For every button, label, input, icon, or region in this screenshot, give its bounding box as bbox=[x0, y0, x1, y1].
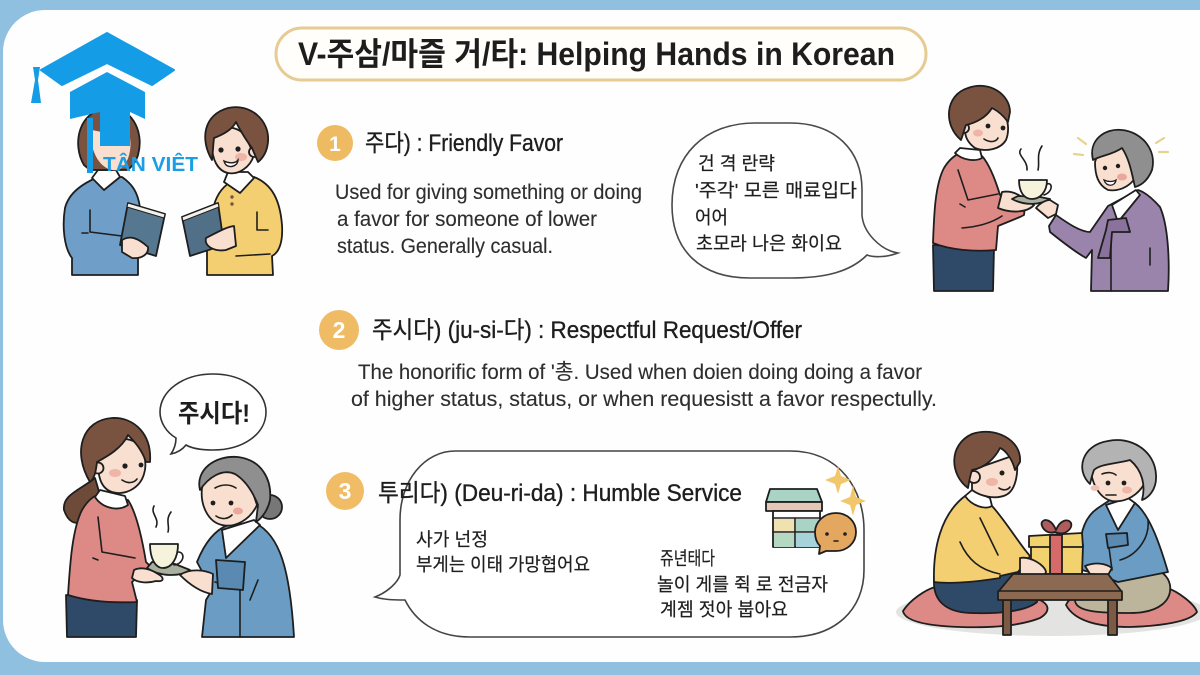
logo: Tan Viet graduation cap: TÂN VIÊT bbox=[103, 152, 198, 176]
illustration: two students with books bbox=[64, 107, 282, 275]
illustration: woman serving tea to grandmother bbox=[64, 374, 294, 637]
description 1: status. Generally casual. bbox=[337, 234, 553, 258]
bubble text right: 놀이 게를 쥑 로 전금자 bbox=[657, 574, 828, 595]
description 1: Used for giving something or doing bbox=[335, 180, 642, 204]
bubble text right: 계젬 젓아 붑아요 bbox=[660, 599, 788, 620]
bubble text left: 사가 넌정 bbox=[416, 529, 488, 550]
logo: Tan Viet graduation cap bbox=[31, 33, 198, 176]
icon: number 3 badge: 3 bbox=[339, 478, 351, 504]
title: V-주삼/마즐 거/타: Helping Hands in Korean bbox=[298, 36, 895, 72]
heading 3: 투리다) (Deu-ri-da) : Humble Service bbox=[378, 480, 742, 507]
heading 1: 주다) : Friendly Favor bbox=[365, 130, 563, 157]
bubble text left: 부게는 이태 가망협어요 bbox=[416, 554, 590, 575]
icon: number 1 badge: 1 bbox=[329, 133, 341, 156]
illustration: offering a gift to grandmother at low table bbox=[896, 432, 1200, 636]
description 2: of higher status, status, or when requesistt a favor respectully. bbox=[351, 387, 937, 411]
speech bubble 1: 어어 bbox=[695, 207, 728, 228]
section 3: Humble Service bbox=[326, 451, 866, 637]
description 2: The honorific form of '총. Used when doien doing doing a favor bbox=[358, 360, 922, 384]
icon: number 1 badge bbox=[317, 125, 353, 161]
icon: number 2 badge bbox=[319, 310, 359, 350]
icon: number 3 badge bbox=[326, 472, 364, 510]
description 2 bbox=[351, 360, 937, 411]
speech bubble 3 bbox=[375, 451, 864, 637]
speech bubble 1: 초모라 나은 화이요 bbox=[696, 233, 842, 254]
description 1: a favor for someone of lower bbox=[337, 207, 597, 231]
speech bubble: 주시다 bbox=[160, 374, 266, 454]
description 1 bbox=[335, 180, 642, 258]
speech bubble 1 bbox=[672, 123, 898, 278]
icon: gift boxes with face and sparkles bbox=[766, 466, 866, 554]
bubble text right: 쥬년태다 bbox=[660, 548, 715, 569]
speech bubble: 주시다: 주시다! bbox=[178, 400, 250, 428]
illustration: man offering tea to grandmother in purple hanbok bbox=[933, 86, 1169, 291]
section 1: Friendly Favor bbox=[317, 125, 642, 258]
icon: number 2 badge: 2 bbox=[333, 317, 345, 343]
section 2: Respectful Request/Offer bbox=[319, 310, 937, 411]
speech bubble 1: 건 격 란략 bbox=[698, 153, 775, 174]
speech bubble 1: '주각' 모른 매료입다 bbox=[695, 180, 857, 201]
title bbox=[276, 28, 926, 80]
bubble text right bbox=[657, 548, 828, 620]
heading 2: 주시다) (ju-si-다) : Respectful Request/Offer bbox=[372, 317, 802, 344]
bubble text left bbox=[416, 529, 590, 575]
